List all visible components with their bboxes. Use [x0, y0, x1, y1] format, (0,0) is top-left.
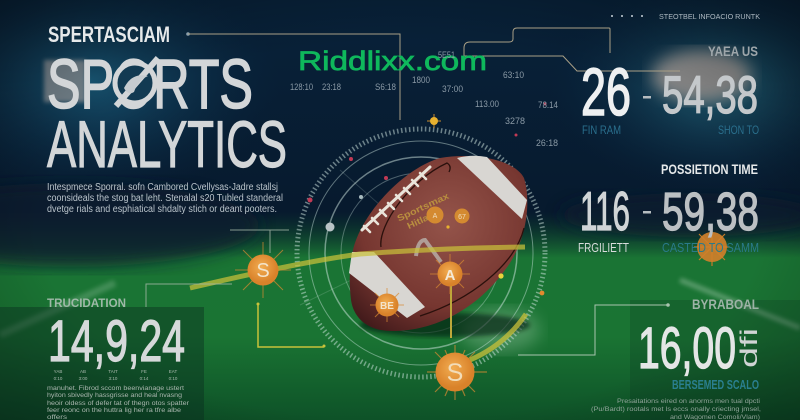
stat block: possession time: 59,38	[662, 182, 759, 242]
floating data numbers: S6:18	[375, 82, 396, 92]
stat block: trucidation: 14,9,24	[48, 309, 185, 374]
stat block: year range: YAEA US	[708, 43, 758, 59]
stat block: year range	[581, 43, 759, 137]
connector: upper left of field	[146, 230, 289, 307]
floating data numbers	[290, 50, 558, 148]
lower right paragraph	[591, 398, 761, 420]
connector: top title line	[186, 32, 400, 120]
ball body	[350, 156, 527, 331]
intro paragraph: coonsideals the stog bat leht. Stenalal s20 Tubled standeral	[47, 193, 283, 204]
small column labels: 3:10	[109, 376, 118, 381]
football	[349, 156, 530, 337]
icon: node dollar left: S	[256, 260, 270, 282]
lower left paragraph: manuhet. Fibrod sccom beenvianage ustert	[47, 385, 184, 392]
floating data numbers: 26:18	[536, 138, 558, 148]
main title: analytics: ANALYTICS	[47, 107, 287, 181]
icon: small badge A: A	[433, 213, 438, 220]
main title: sports: SPORTS	[47, 45, 253, 123]
stat block: byraboal: BYRABOAL	[692, 296, 759, 312]
icon: athlete emblem in title O	[115, 58, 158, 106]
icon: yellow node upper	[427, 114, 441, 128]
lower right paragraph: Presaitations eired on anorms men tual dpcti	[617, 398, 760, 405]
small column labels: 0:10	[169, 376, 178, 381]
floating data numbers: 37:00	[442, 84, 463, 94]
icon: large dollar node bottom	[427, 345, 487, 400]
stat block: possession time: 116	[580, 180, 630, 242]
floating data numbers: 78.14	[538, 100, 558, 110]
small column labels: FE	[141, 369, 147, 374]
ball printed lettering: Sportsmax	[395, 191, 450, 223]
stat block: year range: SHON TO	[718, 123, 759, 137]
icon: small dots	[446, 225, 544, 295]
header small caption: STEOTBEL INFOACIO RUNTK	[659, 14, 760, 21]
lower right paragraph: (Pu/Bardt) rootals met ls eccs onally criecting jmsel,	[591, 406, 761, 413]
icon: node arrow on ball: A	[445, 267, 456, 284]
stat block: possession time: POSSIETION TIME	[661, 161, 758, 177]
floating data numbers: 113.00	[475, 99, 499, 109]
yellow trajectory arc	[190, 247, 526, 360]
stat block: possession time: CASTED TO SAMM	[662, 240, 759, 255]
lower left paragraph: hyiton sbivedly hassgrisse and heal nvasng	[47, 392, 182, 399]
lower left paragraph	[47, 385, 190, 420]
eyebrow title: SPERTASCIAM	[48, 22, 170, 47]
connector: yellow elbow	[256, 302, 326, 348]
header small caption dots	[611, 15, 643, 17]
icon: node dollar left	[235, 242, 291, 298]
connector: vertical from node to base	[450, 284, 452, 338]
small column labels: 0:10	[54, 376, 63, 381]
floating data numbers: 23:18	[322, 82, 341, 92]
lower left paragraph: heoir oldess of defer tat of thegn otos spatter	[47, 400, 190, 407]
small column labels: AB	[80, 369, 86, 374]
intro paragraph: Intespmece Sporral. sofn Cambored Cvellysas-Jadre stallsj	[47, 182, 278, 193]
small column labels: 3:00	[79, 376, 88, 381]
stat block: trucidation: TRUCIDATION	[47, 296, 126, 310]
stat block: year range: 54,38	[662, 66, 758, 125]
ball seams	[381, 163, 524, 316]
intro paragraph: dvetge rials and esphiatical shdalty stich or deant pooters.	[47, 204, 277, 215]
small column labels: TAIT	[108, 369, 118, 374]
intro paragraph	[47, 182, 283, 215]
watermark: Riddlixx.com	[298, 46, 487, 76]
small column labels: YAB	[54, 369, 62, 374]
icon: node arrow on ball	[430, 254, 470, 294]
floating data numbers: 128:10	[290, 82, 313, 92]
floating data numbers: 63:10	[503, 70, 524, 80]
icon: node on lower ball: BE	[380, 301, 394, 312]
ball printed lettering	[395, 191, 455, 233]
small column labels: EAT	[169, 369, 177, 374]
stat block: byraboal	[591, 296, 763, 420]
icon: small badge A	[426, 206, 444, 224]
panel: dark stat backing bottom left	[0, 307, 204, 420]
lower left paragraph: feer reonc on the huttra lig her ra tfre albe	[47, 407, 181, 414]
stat block: possession time	[578, 161, 759, 255]
small column labels	[54, 369, 178, 381]
floating data numbers: 1800	[412, 75, 430, 85]
stat block: byraboal: BERSEMED SCALO	[672, 377, 759, 392]
connector: lower right of field	[518, 303, 670, 355]
ball stripes	[349, 156, 527, 318]
small column labels: 0:14	[140, 376, 149, 381]
stat block: byraboal: 16,00	[638, 316, 736, 381]
floating data numbers: 3278	[505, 116, 525, 126]
ball printed lettering: Hitlax	[406, 210, 435, 231]
icon: orange splash behind caption	[694, 228, 730, 266]
ball white hook mark	[416, 240, 441, 262]
stat block: byraboal: dfi	[736, 328, 763, 368]
stat block: year range: 26	[581, 55, 631, 130]
connector: upper right gold line	[464, 28, 680, 71]
data rings around the ball	[297, 102, 546, 377]
floating data numbers: 5E51	[438, 50, 455, 60]
panel: dark stat backing bottom right	[630, 300, 800, 420]
stat block: possession time: FRGILIETT	[578, 240, 629, 255]
ball laces	[362, 167, 430, 232]
icon: node on lower ball	[370, 288, 404, 322]
icon: small badge 67	[454, 208, 470, 224]
stat block: year range: FIN RAM	[582, 123, 621, 137]
icon: large dollar node bottom: S	[447, 359, 463, 387]
stat block: trucidation	[47, 296, 190, 420]
icon: small badge 67: 67	[458, 214, 466, 221]
